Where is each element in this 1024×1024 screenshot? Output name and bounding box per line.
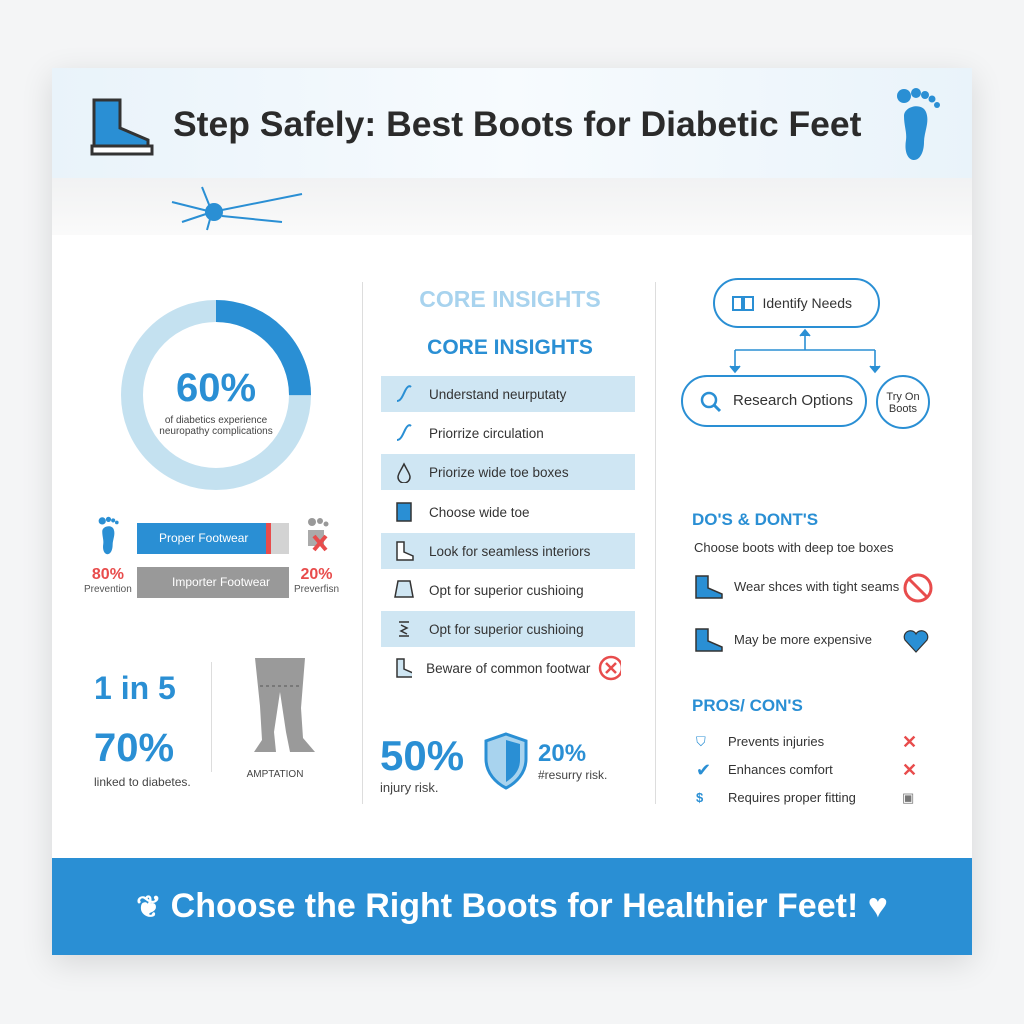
stat 70% <box>94 726 191 789</box>
stat 20%: Preverfisn <box>294 584 339 595</box>
text: Beware of common footwar <box>426 660 590 676</box>
dividers <box>362 282 363 804</box>
panel: pros cons: ▣ <box>902 790 914 805</box>
item: tight seams: Wear shces with tight seams <box>734 579 899 594</box>
donut label: of diabetics experience <box>165 415 267 426</box>
icon: neuron <box>172 186 302 230</box>
panel: dos and donts: Choose boots with deep toe boxes <box>694 540 893 555</box>
heading: PROS/ CON'S <box>692 696 803 715</box>
icon: foot <box>98 516 119 554</box>
bar: improper footwear: Importer Footwear <box>172 575 270 589</box>
amputation illustration <box>246 658 315 780</box>
item: expensive: May be more expensive <box>734 632 872 647</box>
heading faded: CORE INSIGHTS <box>419 286 601 312</box>
heading: CORE INSIGHTS <box>427 336 593 359</box>
text: Priorize wide toe boxes <box>429 464 569 480</box>
item: tight seams <box>695 574 932 602</box>
stat 50%: 50% <box>380 732 464 779</box>
icon: shield <box>484 732 528 790</box>
panel: pros cons: $ <box>696 790 703 805</box>
stat 20%: #resurry risk. <box>538 768 607 782</box>
item: expensive <box>695 628 928 653</box>
card background <box>52 68 972 955</box>
stat 80%: 80% <box>92 566 124 583</box>
panel: pros cons: ⛉ <box>696 734 706 749</box>
donut label: 60% <box>176 366 256 410</box>
decorative band with neuron <box>52 178 972 235</box>
box: try on boots: Try On <box>886 391 920 403</box>
stat 70%: linked to diabetes. <box>94 775 191 789</box>
text: Choose wide toe <box>429 504 530 520</box>
panel: pros cons: ✕ <box>902 732 917 752</box>
stat 20%: 20% <box>300 566 333 583</box>
header <box>52 68 972 178</box>
stat 20% <box>538 740 607 782</box>
flowchart <box>681 278 930 429</box>
footer banner: ❦ Choose the Right Boots for Healthier Feet! ♥ <box>136 887 888 925</box>
text: Priorrize circulation <box>429 426 544 440</box>
icon: footprint <box>897 88 940 160</box>
panel: pros cons: Requires proper fitting <box>728 790 856 805</box>
panel: left statistics <box>84 300 339 789</box>
box: try on boots <box>876 375 930 429</box>
text: Opt for superior cushioing <box>429 622 584 636</box>
bar: proper footwear <box>137 523 289 554</box>
stat 80%: Prevention <box>84 584 132 595</box>
stat 1 in 5: 1 in 5 <box>94 670 176 706</box>
panel: pros cons: ✕ <box>902 760 917 780</box>
panel: pros cons: ✔ <box>696 760 711 780</box>
title: Step Safely: Best Boots for Diabetic Feet <box>173 104 861 144</box>
stat 20%: 20% <box>538 740 586 767</box>
text: Opt for superior cushioing <box>429 582 584 598</box>
stat 80% <box>84 566 132 595</box>
icon: crossed foot <box>308 518 328 552</box>
insight rows <box>381 376 635 412</box>
bar: improper footwear <box>137 567 289 598</box>
panel: pros cons <box>692 696 917 805</box>
panel: pros cons: Prevents injuries <box>728 734 824 749</box>
box: research options <box>681 375 867 427</box>
icon: boot <box>90 98 154 156</box>
panel: dos and donts <box>692 510 932 653</box>
box: try on boots: Boots <box>889 403 917 415</box>
box: identify needs <box>713 278 880 328</box>
donut label <box>159 366 273 437</box>
text: Look for seamless interiors <box>429 544 590 558</box>
box: identify needs: Identify Needs <box>762 295 852 311</box>
panel: core insights <box>419 286 601 359</box>
amputation illustration: AMPTATION <box>247 769 303 780</box>
insight rows: Understand neurputaty <box>429 386 566 402</box>
footer banner <box>52 858 972 955</box>
bar: proper footwear: Proper Footwear <box>159 531 248 545</box>
stat 50%: injury risk. <box>380 780 439 795</box>
stat 70%: 70% <box>94 726 174 770</box>
heading: DO'S & DONT'S <box>692 510 818 529</box>
panel: pros cons: Enhances comfort <box>728 762 833 777</box>
donut chart <box>121 300 311 490</box>
box: research options: Research Options <box>733 392 853 409</box>
donut label: neuropathy complications <box>159 426 273 437</box>
stat 20% <box>294 566 339 595</box>
